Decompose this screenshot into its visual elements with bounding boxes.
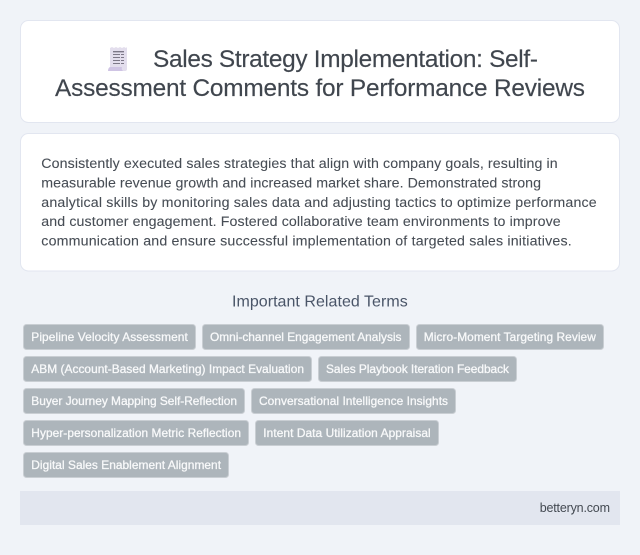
chip: hyper-personalization: Hyper-personalization Metric Reflection	[31, 426, 241, 440]
chip: ABM	[24, 356, 312, 382]
chip: pipeline velocity	[24, 324, 196, 350]
panel: header	[20, 20, 620, 122]
title: Sales Strategy Implementation: Self-	[153, 46, 538, 73]
chip: intent data: Intent Data Utilization Appraisal	[263, 426, 431, 440]
chip: intent data	[256, 420, 438, 446]
chip: omni-channel	[202, 324, 410, 350]
chip: micro-moment: Micro-Moment Targeting Review	[424, 330, 596, 344]
summary text: analytical skills by monitoring sales data and adjusting tactics to optimize performance	[41, 195, 597, 211]
summary text: measurable revenue growth and increased market share. Demonstrated strong	[41, 175, 541, 191]
chip: ABM: ABM (Account-Based Marketing) Impact Evaluation	[31, 362, 304, 376]
summary text: Consistently executed sales strategies that align with company goals, resulting in	[41, 156, 558, 172]
title	[55, 46, 585, 102]
summary text: communication and ensure successful implementation of targeted sales initiatives.	[41, 234, 572, 250]
chip: digital sales	[24, 452, 228, 478]
chip: conversational intelligence: Conversational Intelligence Insights	[259, 394, 448, 408]
footer	[20, 491, 620, 525]
panel: summary	[20, 134, 620, 271]
chip: micro-moment	[416, 324, 604, 350]
panel: term chips	[24, 324, 604, 478]
chip: pipeline velocity: Pipeline Velocity Assessment	[31, 330, 188, 344]
chip: sales playbook: Sales Playbook Iteration Feedback	[326, 362, 509, 376]
footer: betteryn.com	[540, 501, 610, 515]
chip: buyer journey	[24, 388, 244, 414]
chip: conversational intelligence	[252, 388, 456, 414]
summary text: and customer engagement. Fostered collaborative team environments to improve	[41, 214, 561, 230]
title: Assessment Comments for Performance Reviews	[55, 75, 585, 102]
chip: digital sales: Digital Sales Enablement Alignment	[31, 458, 222, 472]
chip: buyer journey: Buyer Journey Mapping Self-Reflection	[31, 394, 237, 408]
icon: receipt scroll	[108, 47, 127, 71]
chip: omni-channel: Omni-channel Engagement Analysis	[210, 330, 402, 344]
heading: important related terms: Important Related Terms	[232, 294, 408, 311]
chip: sales playbook	[318, 356, 516, 382]
chip: hyper-personalization	[24, 420, 248, 446]
summary text	[41, 156, 597, 250]
